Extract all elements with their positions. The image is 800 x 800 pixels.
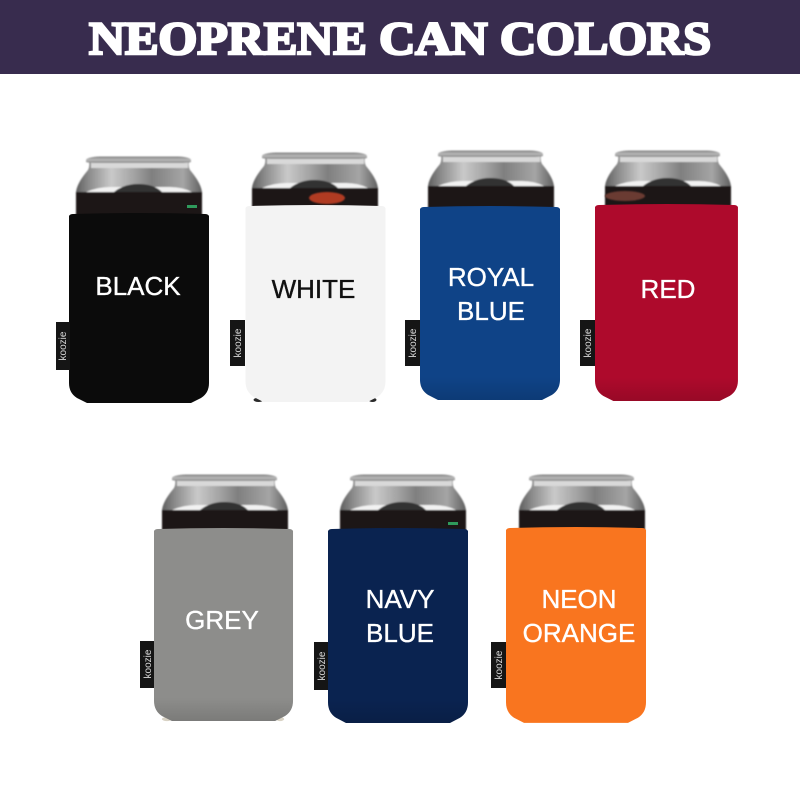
can: neon orange: [491, 474, 646, 723]
label: black: BLACK: [95, 271, 181, 301]
tag: navy blue: koozie: [317, 651, 328, 680]
label: royal blue: BLUE: [457, 296, 525, 326]
tag: black: koozie: [58, 331, 69, 360]
can: white: [230, 152, 386, 402]
tag: white: [230, 320, 245, 366]
tag: red: [580, 320, 595, 366]
tag: royal blue: [405, 320, 420, 366]
title: NEOPRENE CAN COLORS: [89, 13, 711, 65]
tag: neon orange: koozie: [494, 650, 505, 679]
tag: white: koozie: [233, 328, 244, 357]
can: black: [56, 156, 209, 403]
header banner: [0, 0, 800, 74]
label: red: RED: [641, 274, 695, 304]
can: grey: [140, 474, 293, 721]
label: navy blue: BLUE: [366, 618, 434, 648]
tag: grey: [140, 641, 154, 688]
tag: red: koozie: [583, 328, 594, 357]
label: neon orange: ORANGE: [523, 618, 635, 648]
can: red: [580, 150, 738, 401]
label: royal blue: ROYAL: [448, 262, 534, 292]
label: navy blue: NAVY: [366, 584, 434, 614]
tag: navy blue: [314, 642, 328, 690]
tag: black: [56, 322, 70, 370]
can: royal blue: [405, 150, 560, 400]
tag: royal blue: koozie: [408, 328, 419, 357]
label: neon orange: NEON: [541, 584, 617, 614]
label: grey: GREY: [185, 605, 259, 635]
can: navy blue: [314, 474, 468, 723]
tag: grey: koozie: [143, 649, 154, 678]
tag: neon orange: [491, 642, 506, 688]
label: white: WHITE: [272, 274, 355, 304]
